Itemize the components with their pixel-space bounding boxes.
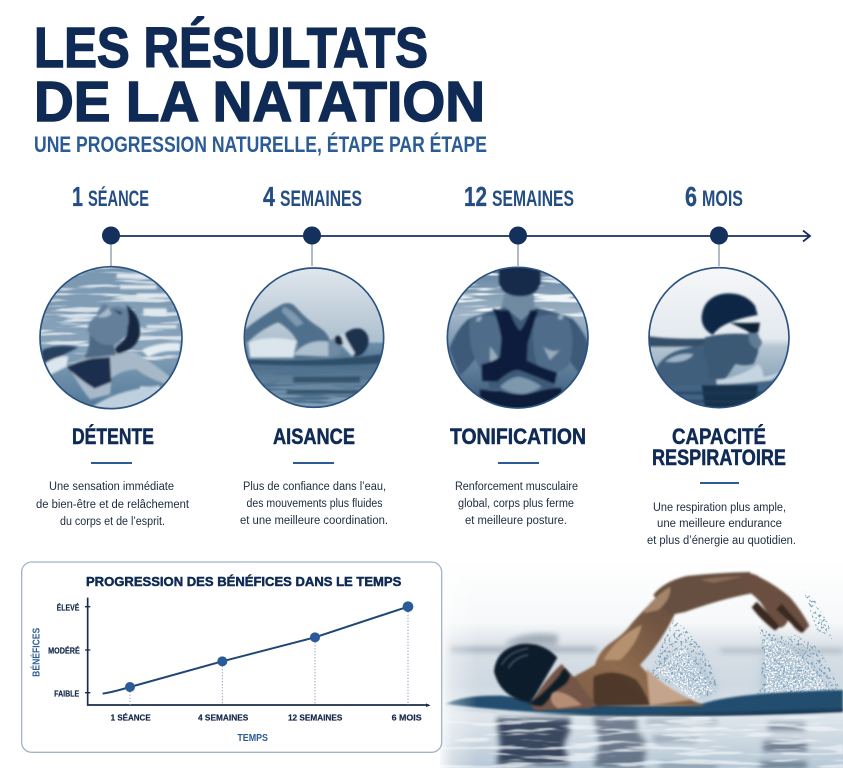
divider: [91, 462, 132, 464]
arm: [244, 303, 330, 359]
milestone label: 6 mois: MOIS: [702, 186, 743, 211]
column: aisance: [240, 424, 388, 527]
title: [34, 16, 485, 134]
tree line: [647, 336, 705, 347]
shadow at armpit: [593, 672, 650, 707]
description: [455, 481, 578, 527]
timeline dots: [102, 226, 728, 244]
distant shoreline haze: [450, 634, 843, 653]
subtitle: UNE PROGRESSION NATURELLE, ÉTAPE PAR ÉTAPE: [34, 132, 487, 157]
hand: [741, 574, 809, 633]
heading: TONIFICATION: [450, 424, 586, 449]
shoulder: [656, 343, 717, 387]
y axis labels: MODÉRÉ: [48, 645, 80, 655]
description: Une sensation immédiate: [49, 481, 174, 493]
divider: [293, 462, 334, 464]
x axis labels: 6 MOIS: [392, 713, 422, 723]
splash: [717, 364, 780, 384]
photo: large swimmer with splash: [437, 560, 843, 768]
divider: [498, 462, 539, 464]
column: capacité respiratoire: [647, 424, 796, 547]
description: Une respiration plus ample,: [653, 502, 786, 514]
water reflections: [497, 717, 807, 768]
milestone label: 1 séance: SÉANCE: [88, 186, 149, 211]
photo: swimmer breathing: [647, 267, 793, 412]
title: DE LA NATATION: [34, 70, 485, 134]
heading: RESPIRATOIRE: [652, 445, 786, 470]
x axis labels: 4 SEMAINES: [198, 713, 249, 723]
water dark: [480, 388, 562, 412]
milestone label: 12 semaines: [464, 181, 574, 212]
x axis labels: 12 SEMAINES: [288, 713, 343, 723]
drop lines: [130, 612, 408, 705]
y axis labels: [48, 602, 80, 698]
cap and head: [499, 264, 541, 296]
hair: [115, 305, 140, 354]
photo: floating swimmer: [37, 263, 187, 413]
water surface swell: [445, 690, 843, 715]
description: Renforcement musculaire: [455, 481, 578, 493]
milestone label: 4 semaines: 4: [263, 181, 275, 212]
description: de bien-être et de relâchement: [36, 499, 190, 511]
description: du corps et de l’esprit.: [60, 516, 165, 528]
column: tonification: [450, 424, 586, 527]
milestone label: 12 semaines: 12: [464, 181, 487, 212]
x axis title: TEMPS: [237, 733, 269, 744]
progress line: [103, 607, 408, 694]
timeline with milestones: [72, 181, 810, 266]
goggles: [528, 668, 570, 706]
swim cap: [494, 644, 557, 703]
data points: [125, 601, 413, 692]
description: et meilleure posture.: [465, 515, 567, 527]
milestone label: 6 mois: [685, 181, 743, 212]
splash: [248, 338, 297, 358]
neck: [84, 332, 116, 358]
description: Plus de confiance dans l’eau,: [243, 481, 386, 493]
column: détente: [36, 424, 190, 528]
cut-out: [500, 377, 542, 394]
timeline stems: [111, 244, 719, 266]
milestone label: 12 semaines: SEMAINES: [492, 186, 574, 211]
highlights: [603, 625, 642, 660]
cap: [702, 293, 758, 335]
timeline arrow: [111, 230, 810, 242]
photo: swimmer's back: [445, 264, 592, 412]
y axis title: BÉNÉFICES: [31, 627, 42, 677]
dark water: [650, 378, 790, 412]
panel frame: [22, 562, 442, 752]
reflection ripples: [440, 717, 843, 768]
y axis labels: ÉLEVÉ: [57, 602, 80, 612]
axis arrow tip: [426, 703, 431, 707]
heading: DÉTENTE: [72, 424, 154, 449]
goggles: [730, 323, 760, 333]
chart title: PROGRESSION DES BÉNÉFICES DANS LE TEMPS: [86, 574, 401, 589]
milestone label: 1 séance: [72, 181, 149, 212]
goggles strip: [337, 333, 355, 356]
left edge fade: [437, 560, 843, 768]
torso and upper arm: [562, 585, 705, 706]
axes: [85, 598, 428, 705]
swimsuit: [481, 308, 557, 384]
y axis labels: FAIBLE: [54, 688, 79, 698]
description: des mouvements plus fluides: [246, 498, 383, 510]
face: [87, 304, 130, 345]
forearm: [653, 572, 760, 615]
heading: [652, 424, 786, 470]
description: une meilleure endurance: [657, 518, 782, 530]
description: [647, 502, 796, 547]
panel: chart of benefits over time: [22, 562, 442, 752]
neck: [500, 292, 536, 320]
heading: AISANCE: [273, 424, 355, 449]
swimmer face: [530, 664, 597, 710]
splash spray: [650, 590, 840, 700]
milestone label: 4 semaines: [263, 181, 362, 212]
waterline: [245, 354, 382, 366]
description: global, corps plus ferme: [458, 498, 574, 510]
photo: front crawl swimmer: [242, 267, 388, 410]
divider: [700, 482, 739, 484]
torso: [293, 341, 330, 357]
cap: [345, 328, 369, 357]
swimsuit: [67, 357, 111, 389]
arm and shoulders: [68, 352, 172, 399]
milestone label: 1 séance: 1: [72, 181, 83, 212]
milestone label: 6 mois: 6: [685, 181, 697, 212]
neck and face: [704, 334, 762, 379]
heading: CAPACITÉ: [672, 424, 766, 449]
back and arms: [449, 307, 591, 389]
x axis labels: 1 SÉANCE: [111, 713, 151, 723]
description: [240, 481, 388, 527]
x axis labels: [111, 713, 422, 723]
description: et plus d’énergie au quotidien.: [647, 535, 796, 547]
milestone label: 4 semaines: SEMAINES: [280, 186, 362, 211]
title: LES RÉSULTATS: [34, 16, 428, 80]
description: et une meilleure coordination.: [240, 515, 388, 527]
swimmer body and arm: [530, 572, 809, 710]
description: [36, 481, 190, 528]
